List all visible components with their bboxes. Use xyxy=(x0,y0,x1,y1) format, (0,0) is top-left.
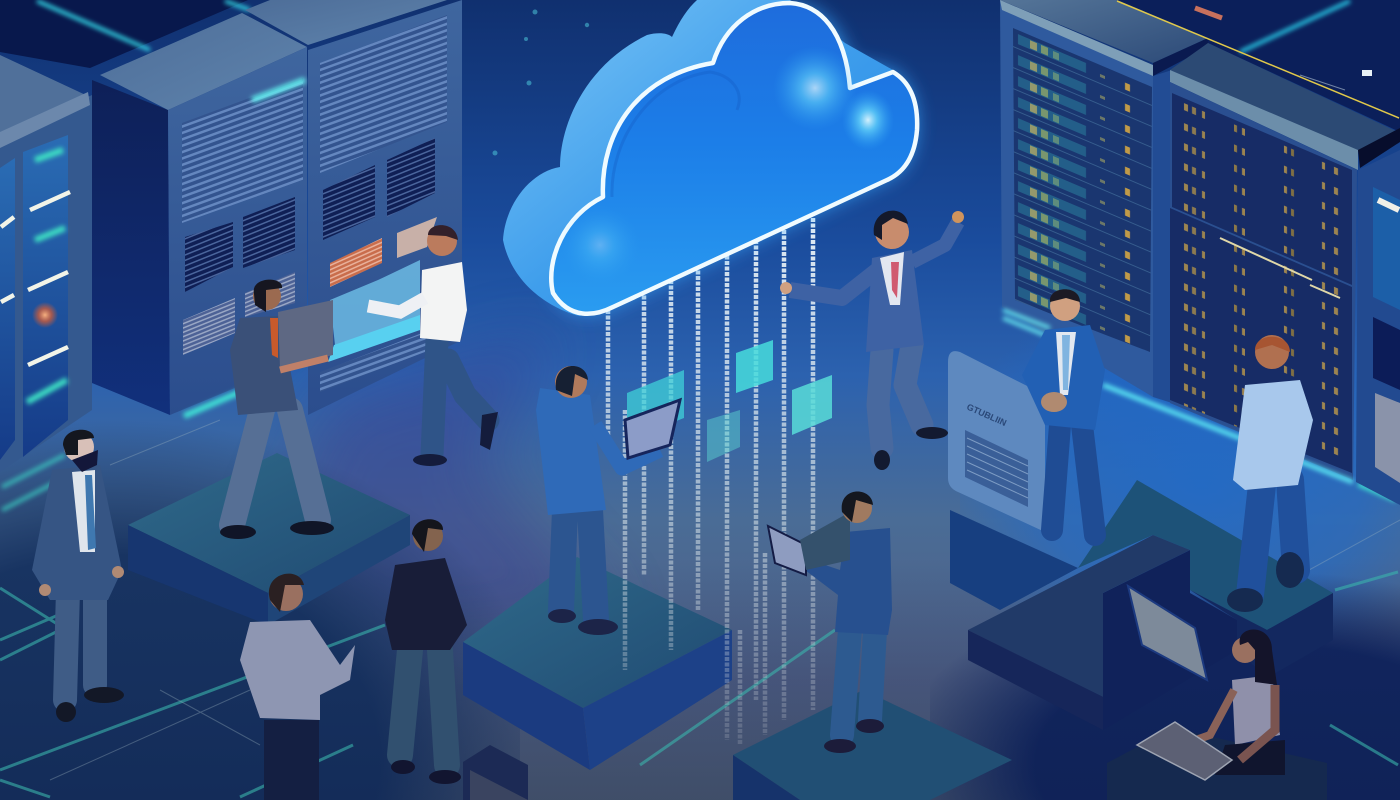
floating data panels xyxy=(627,340,832,462)
server rack: far left xyxy=(0,55,92,472)
person: raising arms by the cloud xyxy=(780,211,964,470)
server rack: near center xyxy=(1000,0,1208,397)
person: man with tablet xyxy=(536,366,680,635)
background stars xyxy=(492,10,589,156)
platform: bottom center xyxy=(733,690,1012,800)
person: man in light shirt on right xyxy=(1227,335,1313,612)
server rack: near center xyxy=(245,0,462,415)
cloud highlights xyxy=(773,46,857,130)
person: man in black shirt xyxy=(385,519,467,784)
cloud lobe creases xyxy=(612,72,739,197)
platform: right rear xyxy=(1078,480,1333,678)
right server racks xyxy=(1000,0,1400,505)
platforms xyxy=(128,351,1333,800)
equipment cabinet xyxy=(948,351,1045,532)
platform: woman's desk xyxy=(1107,728,1327,800)
server rack: far right xyxy=(1356,150,1400,505)
left server racks xyxy=(0,0,462,472)
person: man with mask xyxy=(32,430,124,722)
platform: left xyxy=(128,453,410,625)
desk: right xyxy=(968,535,1237,730)
cloud front face xyxy=(551,3,917,314)
person: man in grey shirt xyxy=(240,574,355,800)
platform: center xyxy=(463,557,732,770)
cloud xyxy=(503,0,917,316)
person: man with laptop xyxy=(220,280,334,539)
equipment cabinet: GTUBLIIN xyxy=(965,402,1008,428)
person: woman at laptop xyxy=(1137,629,1285,780)
box: bottom center xyxy=(463,745,528,800)
person: man in blue suit by rack xyxy=(1022,289,1105,535)
person: man with tablet, back view xyxy=(768,492,892,753)
server rack: right xyxy=(1103,1,1400,500)
person: man in white shirt at rack xyxy=(368,225,498,466)
server rack: center left xyxy=(92,13,307,416)
cloud extrusion xyxy=(503,0,893,316)
open laptop on desk xyxy=(1128,586,1207,680)
floor reflection under cabinet xyxy=(950,510,1078,610)
data chains under cloud xyxy=(608,218,813,745)
cloud glow xyxy=(551,3,917,314)
